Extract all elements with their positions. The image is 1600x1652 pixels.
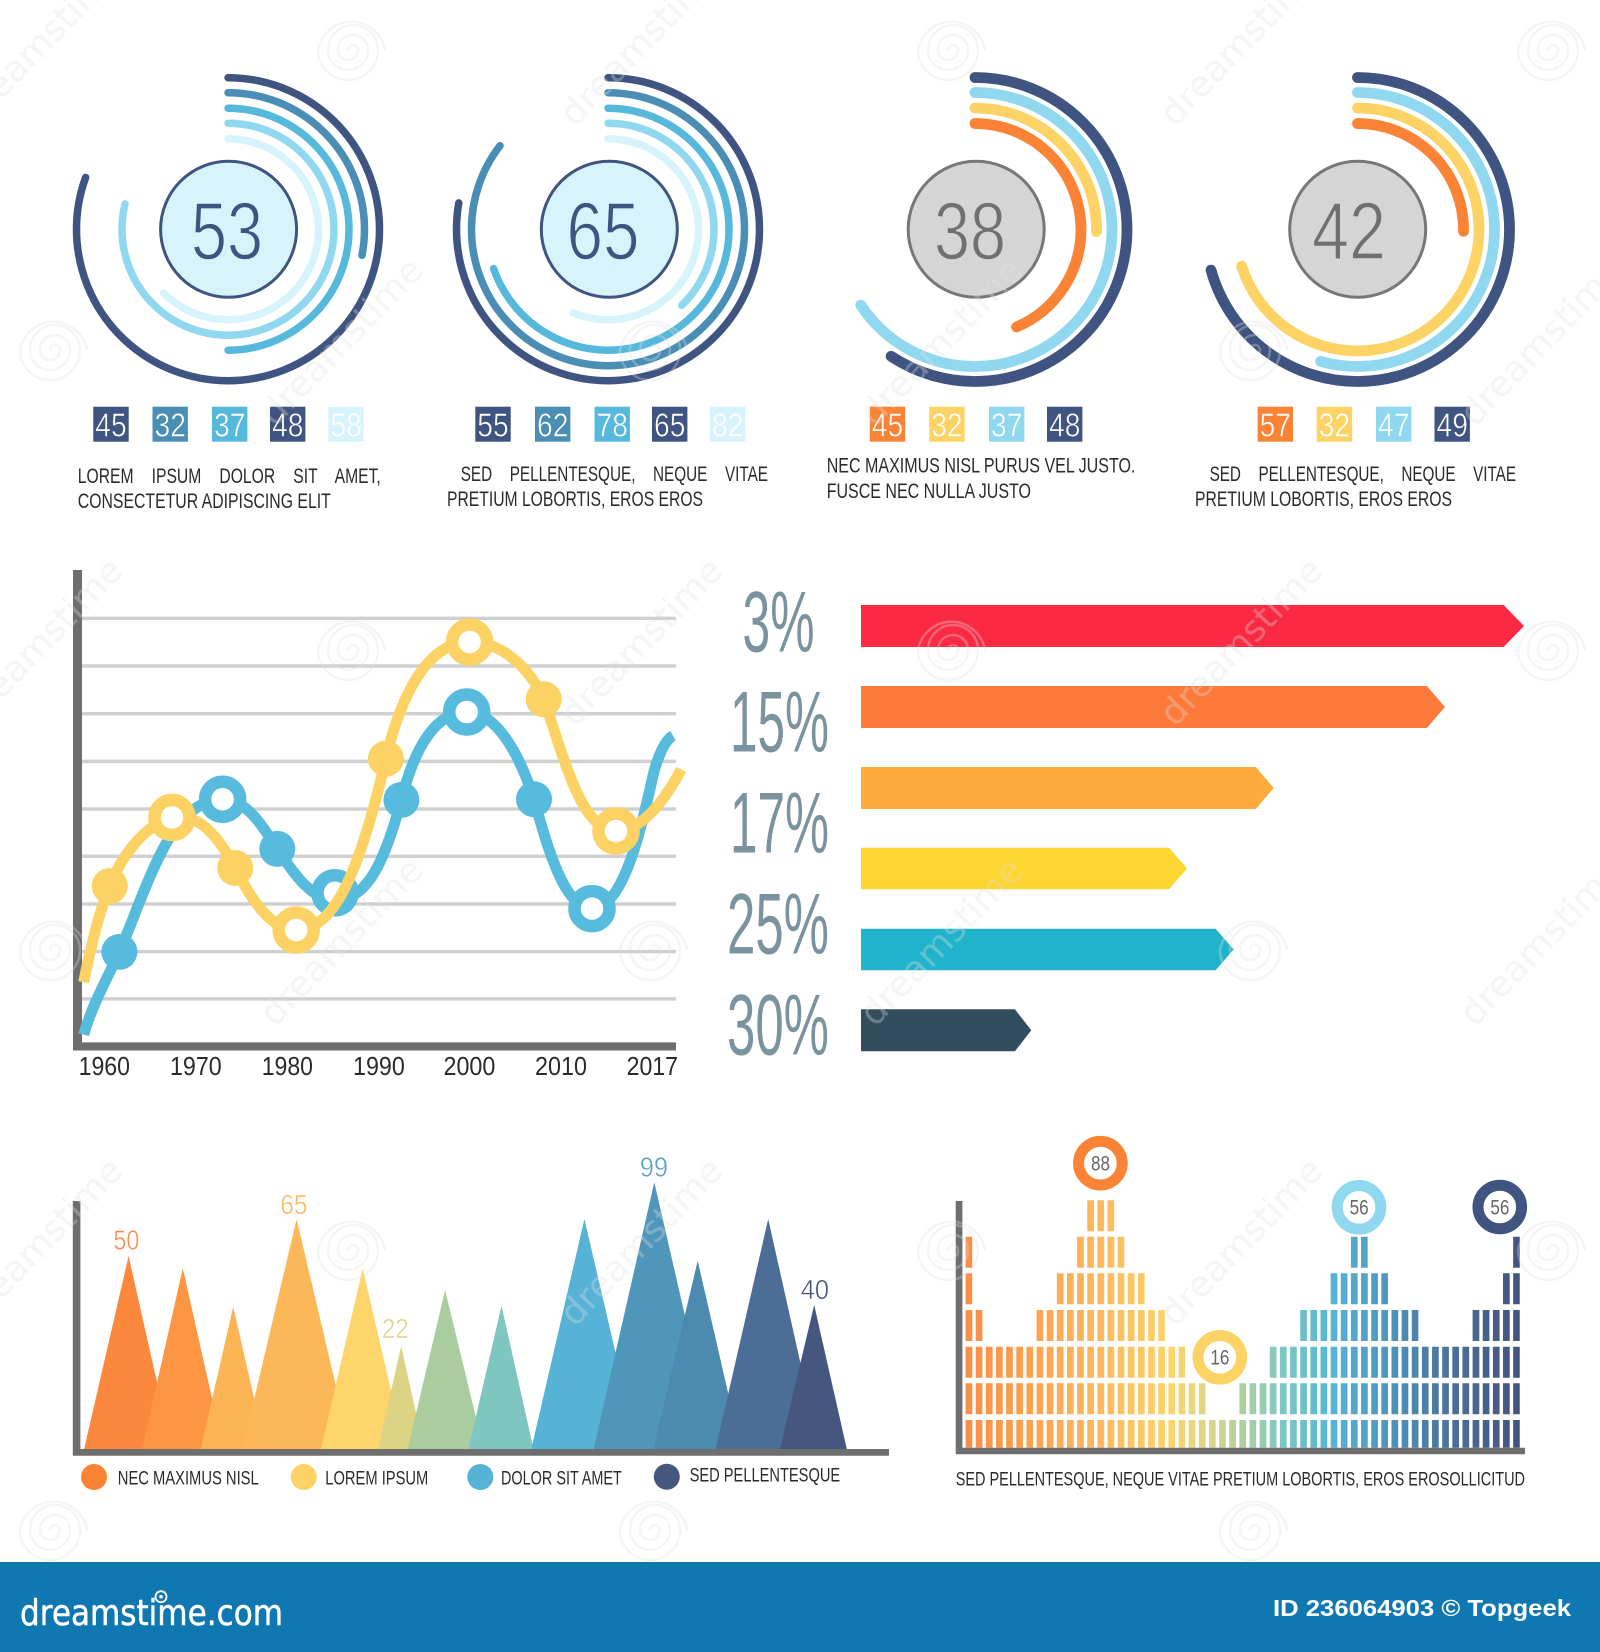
image id credit: ID 236064903 © Topgeek bbox=[1273, 1595, 1571, 1621]
ring marker 56 light: 56 bbox=[1350, 1196, 1369, 1220]
center value 65 bbox=[541, 161, 677, 297]
number boxes: 58 bbox=[330, 407, 362, 444]
ring marker 16 bbox=[1198, 1336, 1242, 1379]
panel: segmented bar chart bbox=[956, 1141, 1525, 1491]
radial arcs 42 bbox=[1206, 78, 1510, 382]
bar 3%: 3% bbox=[742, 575, 814, 671]
watermark overlay: dreamstime bbox=[252, 250, 432, 434]
number boxes: 45 bbox=[872, 407, 903, 444]
watermark overlay: dreamstime bbox=[552, 1150, 732, 1334]
number boxes: 55 bbox=[477, 407, 509, 444]
center value 42: 42 bbox=[1312, 186, 1386, 277]
watermark overlay: dreamstime bbox=[852, 250, 1032, 434]
bar 17% bbox=[730, 767, 1274, 872]
caption: CONSECTETUR ADIPISCING ELIT bbox=[78, 490, 331, 513]
center value 38: 38 bbox=[934, 186, 1006, 277]
panel: radial chart 53 bbox=[76, 78, 381, 513]
chart axes bbox=[73, 1201, 889, 1456]
bar 25%: 25% bbox=[727, 876, 829, 972]
ring marker 16: 16 bbox=[1210, 1346, 1229, 1370]
panel: percentage arrow bars bbox=[727, 575, 1524, 1073]
caption bbox=[78, 465, 381, 513]
caption: FUSCE NEC NULLA JUSTO bbox=[827, 480, 1031, 503]
bar 15% bbox=[730, 675, 1445, 771]
number boxes: 78 bbox=[596, 407, 628, 444]
panel: radial chart 65 bbox=[447, 78, 768, 511]
peak values bbox=[113, 1152, 829, 1344]
panel: mountain chart bbox=[73, 1152, 889, 1490]
ring marker 56 navy: 56 bbox=[1490, 1196, 1509, 1220]
year labels: 2010 bbox=[535, 1051, 587, 1081]
watermark overlay: dreamstime bbox=[252, 850, 432, 1034]
caption bbox=[1195, 463, 1516, 511]
legend: SED PELLENTESQUE bbox=[690, 1465, 840, 1486]
legend bbox=[81, 1464, 840, 1490]
caption bbox=[447, 463, 768, 511]
blue series bbox=[84, 694, 673, 1035]
peak values: 40 bbox=[801, 1274, 829, 1305]
number boxes: 32 bbox=[154, 407, 186, 444]
panel: radial chart 38 bbox=[823, 78, 1135, 503]
ring marker 56 light bbox=[1337, 1186, 1381, 1229]
number boxes: 45 bbox=[95, 407, 127, 444]
legend: DOLOR SIT AMET bbox=[501, 1468, 622, 1489]
center value 65: 65 bbox=[566, 186, 640, 277]
peak values: 65 bbox=[280, 1189, 308, 1220]
watermark overlay: dreamstime bbox=[552, 550, 732, 734]
number boxes: 37 bbox=[214, 407, 245, 444]
bar 15%: 15% bbox=[730, 675, 829, 771]
watermark overlay: dreamstime bbox=[852, 850, 1032, 1034]
caption bbox=[827, 455, 1135, 503]
panel: radial chart 42 bbox=[1195, 78, 1516, 511]
year labels bbox=[79, 1051, 678, 1081]
legend: LOREM IPSUM bbox=[325, 1468, 428, 1489]
logo text: dreamstime.com bbox=[20, 1593, 283, 1634]
ring marker 88 bbox=[1079, 1141, 1122, 1185]
peak values: 22 bbox=[382, 1313, 409, 1344]
number boxes: 48 bbox=[1049, 407, 1080, 444]
center value 42 bbox=[1290, 161, 1426, 297]
peak values: 99 bbox=[640, 1152, 668, 1183]
bar 3% bbox=[742, 575, 1524, 671]
number boxes: 48 bbox=[272, 407, 303, 444]
bar 30% bbox=[727, 929, 1234, 1073]
footer bar bbox=[0, 1562, 1600, 1652]
number boxes bbox=[475, 407, 745, 444]
number boxes: 37 bbox=[991, 407, 1022, 444]
year labels: 1990 bbox=[353, 1051, 405, 1081]
caption: SED PELLENTESQUE, NEQUE VITAE bbox=[461, 463, 768, 486]
center value 53 bbox=[161, 161, 297, 297]
number boxes: 49 bbox=[1436, 407, 1468, 444]
bar 17%: 17% bbox=[730, 776, 829, 872]
panel: line chart bbox=[73, 570, 681, 1081]
year labels: 1960 bbox=[79, 1051, 130, 1081]
segmented columns bbox=[966, 1216, 1520, 1434]
number boxes: 47 bbox=[1378, 407, 1409, 444]
radial arcs 65 bbox=[456, 78, 760, 381]
caption: NEC MAXIMUS NISL PURUS VEL JUSTO. bbox=[827, 455, 1135, 478]
watermark overlay: dreamstime bbox=[1152, 550, 1332, 734]
number boxes: 82 bbox=[712, 407, 743, 444]
number boxes bbox=[870, 407, 1082, 444]
bar 30%: 30% bbox=[727, 977, 829, 1073]
caption: LOREM IPSUM DOLOR SIT AMET, bbox=[78, 465, 381, 488]
year labels: 2000 bbox=[444, 1051, 495, 1081]
ring marker 56 navy bbox=[1478, 1185, 1522, 1229]
caption: PRETIUM LOBORTIS, EROS EROS bbox=[447, 488, 703, 511]
yellow series bbox=[84, 624, 681, 982]
year labels: 1970 bbox=[170, 1051, 222, 1081]
number boxes: 57 bbox=[1260, 407, 1291, 444]
peak values: 50 bbox=[113, 1224, 139, 1255]
ring marker 88: 88 bbox=[1091, 1152, 1110, 1176]
bar 25% bbox=[727, 848, 1187, 972]
number boxes: 65 bbox=[654, 407, 685, 444]
watermark overlay: dreamstime bbox=[1152, 1150, 1332, 1334]
chart axes bbox=[73, 570, 676, 1050]
center value 53: 53 bbox=[191, 186, 263, 277]
chart axes bbox=[956, 1201, 1525, 1454]
number boxes: 32 bbox=[931, 407, 963, 444]
legend: NEC MAXIMUS NISL bbox=[118, 1468, 259, 1489]
number boxes: 32 bbox=[1319, 407, 1350, 444]
radial arcs 38 bbox=[823, 78, 1127, 382]
number boxes bbox=[1258, 407, 1470, 444]
radial arcs 53 bbox=[76, 78, 380, 381]
number boxes bbox=[93, 407, 364, 444]
triangles bbox=[84, 1182, 847, 1449]
caption: PRETIUM LOBORTIS, EROS EROS bbox=[1195, 488, 1452, 511]
year labels: 2017 bbox=[627, 1051, 678, 1081]
year labels: 1980 bbox=[262, 1051, 313, 1081]
center value 38 bbox=[908, 161, 1044, 297]
number boxes: 62 bbox=[537, 407, 568, 444]
